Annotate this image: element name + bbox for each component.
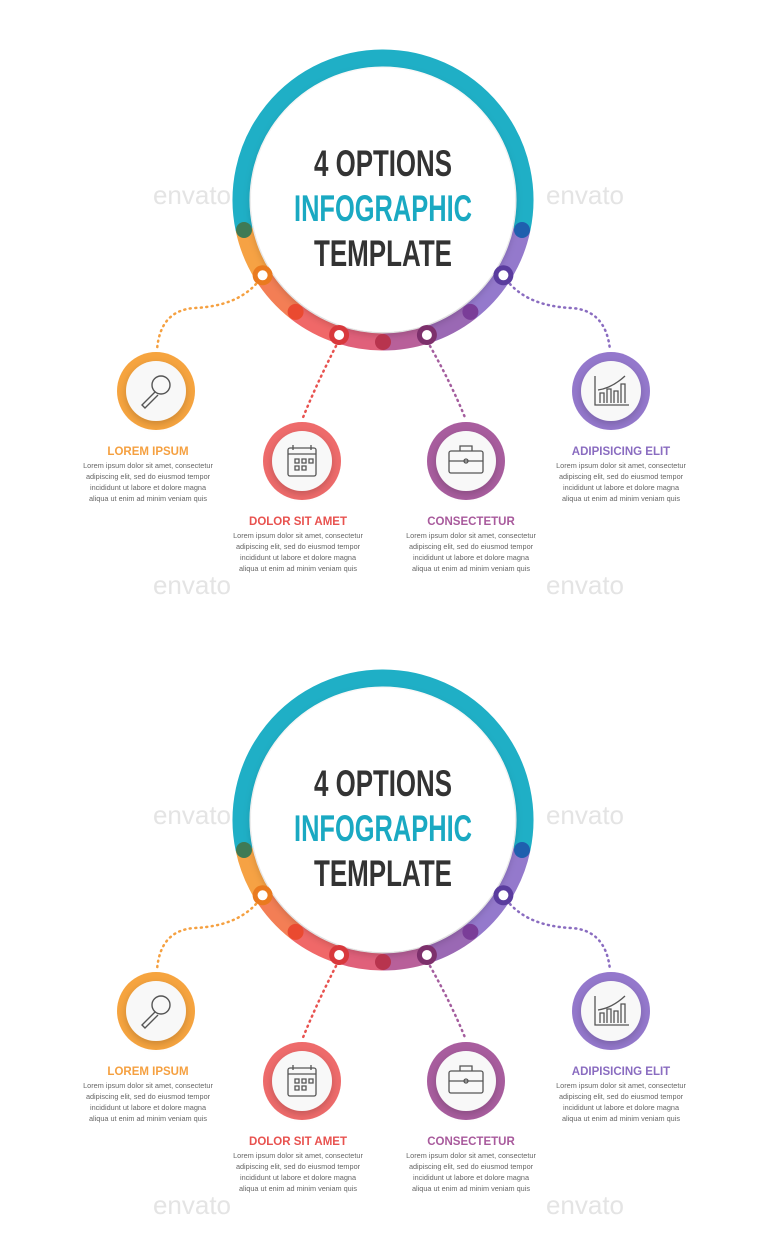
option 2: dolor sit amet xyxy=(233,422,363,573)
inner disk with title: 4 OPTIONS xyxy=(314,763,452,804)
option 4: adipisicing elit: adipiscing elit, sed do eiusmod tempor xyxy=(559,472,684,481)
infographic: bottom copy xyxy=(83,678,686,1193)
option 3: consectetur: CONSECTETUR xyxy=(427,516,515,528)
option 4: adipisicing elit xyxy=(556,972,686,1123)
option 2: dolor sit amet: DOLOR SIT AMET xyxy=(249,516,347,528)
connectors xyxy=(157,284,610,420)
option 1: lorem ipsum: adipiscing elit, sed do eiusmod tempor xyxy=(86,1092,211,1101)
option 3: consectetur xyxy=(406,422,536,573)
option 1: lorem ipsum xyxy=(83,352,213,503)
watermarks: envato xyxy=(546,1190,624,1220)
option 2: dolor sit amet: adipiscing elit, sed do eiusmod tempor xyxy=(236,1162,361,1171)
watermarks: envato xyxy=(546,800,624,830)
ring dots xyxy=(236,222,530,350)
option 3: consectetur: Lorem ipsum dolor sit amet, consectetur xyxy=(406,1151,536,1160)
option 4: adipisicing elit: ADIPISICING ELIT xyxy=(572,446,670,458)
option 1: lorem ipsum: incididunt ut labore et dolore magna xyxy=(90,483,207,492)
option 4: adipisicing elit xyxy=(556,352,686,503)
watermarks: envato xyxy=(153,570,231,600)
ring dots xyxy=(236,842,530,970)
option 1: lorem ipsum: aliqua ut enim ad minim veniam quis xyxy=(89,494,207,503)
watermarks: envato xyxy=(153,800,231,830)
main ring xyxy=(241,678,525,962)
connectors xyxy=(157,904,610,1040)
option 1: lorem ipsum: incididunt ut labore et dolore magna xyxy=(90,1103,207,1112)
option 1: lorem ipsum: Lorem ipsum dolor sit amet, consectetur xyxy=(83,1081,213,1090)
option 1: lorem ipsum: Lorem ipsum dolor sit amet, consectetur xyxy=(83,461,213,470)
option 2: dolor sit amet: incididunt ut labore et dolore magna xyxy=(240,553,357,562)
inner disk with title xyxy=(251,688,515,952)
option 1: lorem ipsum: adipiscing elit, sed do eiusmod tempor xyxy=(86,472,211,481)
option 4: adipisicing elit: ADIPISICING ELIT xyxy=(572,1066,670,1078)
option 3: consectetur xyxy=(406,1042,536,1193)
option 3: consectetur: CONSECTETUR xyxy=(427,1136,515,1148)
option 3: consectetur: aliqua ut enim ad minim veniam quis xyxy=(412,564,530,573)
option 1: lorem ipsum xyxy=(83,972,213,1123)
main ring xyxy=(241,58,525,342)
watermarks: envato xyxy=(153,180,231,210)
watermarks: envato xyxy=(153,1190,231,1220)
inner disk with title: TEMPLATE xyxy=(314,853,452,894)
infographic: top copy xyxy=(83,58,686,573)
inner disk with title: INFOGRAPHIC xyxy=(294,808,472,849)
option 4: adipisicing elit: adipiscing elit, sed do eiusmod tempor xyxy=(559,1092,684,1101)
option 3: consectetur: incididunt ut labore et dolore magna xyxy=(413,1173,530,1182)
inner disk with title: INFOGRAPHIC xyxy=(294,188,472,229)
option 4: adipisicing elit: aliqua ut enim ad minim veniam quis xyxy=(562,494,680,503)
option 3: consectetur: aliqua ut enim ad minim veniam quis xyxy=(412,1184,530,1193)
option 3: consectetur: Lorem ipsum dolor sit amet, consectetur xyxy=(406,531,536,540)
option 2: dolor sit amet: DOLOR SIT AMET xyxy=(249,1136,347,1148)
inner disk with title xyxy=(251,68,515,332)
option 4: adipisicing elit: incididunt ut labore et dolore magna xyxy=(563,483,680,492)
option 4: adipisicing elit: Lorem ipsum dolor sit amet, consectetur xyxy=(556,461,686,470)
inner disk with title: 4 OPTIONS xyxy=(314,143,452,184)
option 1: lorem ipsum: LOREM IPSUM xyxy=(107,1066,189,1078)
option 4: adipisicing elit: Lorem ipsum dolor sit amet, consectetur xyxy=(556,1081,686,1090)
option 2: dolor sit amet: aliqua ut enim ad minim veniam quis xyxy=(239,1184,357,1193)
inner disk with title: TEMPLATE xyxy=(314,233,452,274)
option 2: dolor sit amet: Lorem ipsum dolor sit amet, consectetur xyxy=(233,531,363,540)
option 2: dolor sit amet xyxy=(233,1042,363,1193)
option 4: adipisicing elit: incididunt ut labore et dolore magna xyxy=(563,1103,680,1112)
watermarks: envato xyxy=(546,180,624,210)
option 3: consectetur: incididunt ut labore et dolore magna xyxy=(413,553,530,562)
option 1: lorem ipsum: LOREM IPSUM xyxy=(107,446,189,458)
option 3: consectetur: adipiscing elit, sed do eiusmod tempor xyxy=(409,542,534,551)
option 1: lorem ipsum: aliqua ut enim ad minim veniam quis xyxy=(89,1114,207,1123)
option 4: adipisicing elit: aliqua ut enim ad minim veniam quis xyxy=(562,1114,680,1123)
option 2: dolor sit amet: Lorem ipsum dolor sit amet, consectetur xyxy=(233,1151,363,1160)
option 3: consectetur: adipiscing elit, sed do eiusmod tempor xyxy=(409,1162,534,1171)
option 2: dolor sit amet: adipiscing elit, sed do eiusmod tempor xyxy=(236,542,361,551)
watermarks: envato xyxy=(546,570,624,600)
watermarks xyxy=(153,180,624,1220)
option 2: dolor sit amet: aliqua ut enim ad minim veniam quis xyxy=(239,564,357,573)
option 2: dolor sit amet: incididunt ut labore et dolore magna xyxy=(240,1173,357,1182)
